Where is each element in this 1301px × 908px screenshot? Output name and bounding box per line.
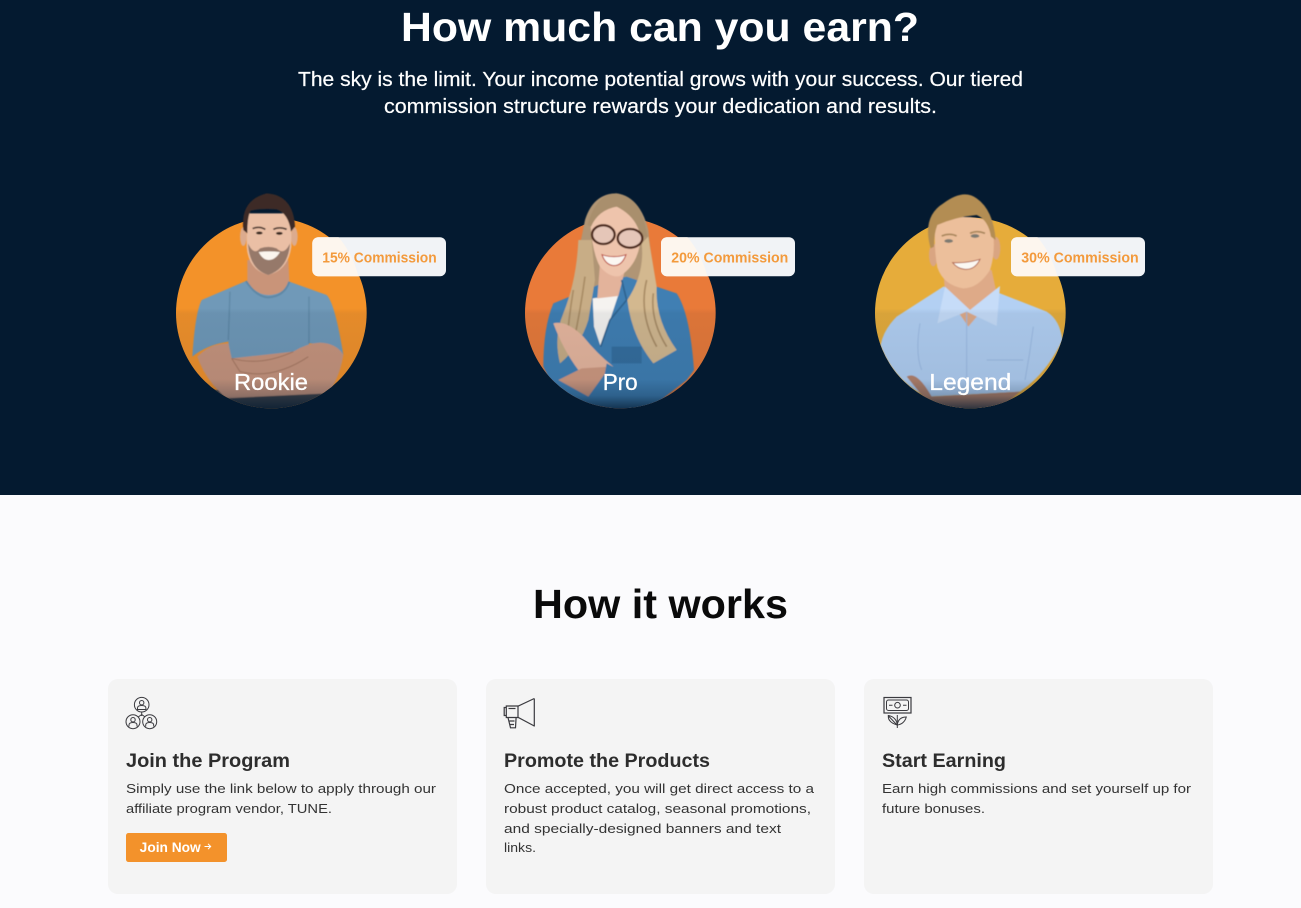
portrait: legend <box>875 194 1066 408</box>
card title: Promote the Products <box>504 750 710 772</box>
tier name: pro: Pro <box>603 369 638 395</box>
portrait: pro <box>525 192 716 408</box>
card body text <box>126 781 437 816</box>
card: join the program <box>108 679 457 894</box>
card: start earning <box>864 679 1213 894</box>
icon: megaphone <box>504 698 534 728</box>
card body text: future bonuses. <box>882 801 985 816</box>
button: join now <box>126 833 227 862</box>
tier name: legend: Legend <box>929 369 1011 395</box>
icon: money plant <box>884 698 911 728</box>
tier: rookie <box>160 193 446 413</box>
commission badge: 20%: 20% Commission <box>671 250 788 266</box>
card body text: and specially-designed banners and text <box>504 821 781 836</box>
card body text: Once accepted, you will get direct access to a <box>504 781 815 796</box>
intro text: commission structure rewards your dedication and results. <box>384 96 937 118</box>
intro text <box>298 69 1023 118</box>
heading: how it works: How it works <box>533 581 788 627</box>
tier name: rookie: Rookie <box>234 369 308 395</box>
commission badge: 15%: 15% Commission <box>322 250 437 266</box>
card body text: affiliate program vendor, TUNE. <box>126 801 332 816</box>
tier: pro <box>510 193 795 413</box>
card: promote the products <box>486 679 835 894</box>
card body text <box>504 781 815 855</box>
card body text <box>882 781 1192 816</box>
portrait: rookie <box>176 193 367 408</box>
dark section background <box>0 0 1301 495</box>
commission badge: 20% <box>661 237 795 276</box>
card body text: links. <box>504 840 536 855</box>
intro text: The sky is the limit. Your income potential grows with your success. Our tiered <box>298 69 1023 91</box>
commission badge: 30% <box>1011 237 1145 276</box>
card title: Start Earning <box>882 750 1006 772</box>
panel: earnings section <box>0 0 1301 495</box>
card body text: robust product catalog, seasonal promotions, <box>504 801 811 816</box>
tier: legend <box>860 194 1145 413</box>
icon: connected people network <box>126 697 157 729</box>
card body text: Earn high commissions and set yourself up for <box>882 781 1192 796</box>
heading: how much can you earn: How much can you earn? <box>401 4 919 50</box>
commission badge: 15% <box>312 237 446 276</box>
commission badge: 30%: 30% Commission <box>1021 250 1139 266</box>
button: join now: Join Now <box>140 840 201 855</box>
card body text: Simply use the link below to apply through our <box>126 781 437 796</box>
card title: Join the Program <box>126 750 290 772</box>
panel: how it works section <box>108 581 1213 894</box>
